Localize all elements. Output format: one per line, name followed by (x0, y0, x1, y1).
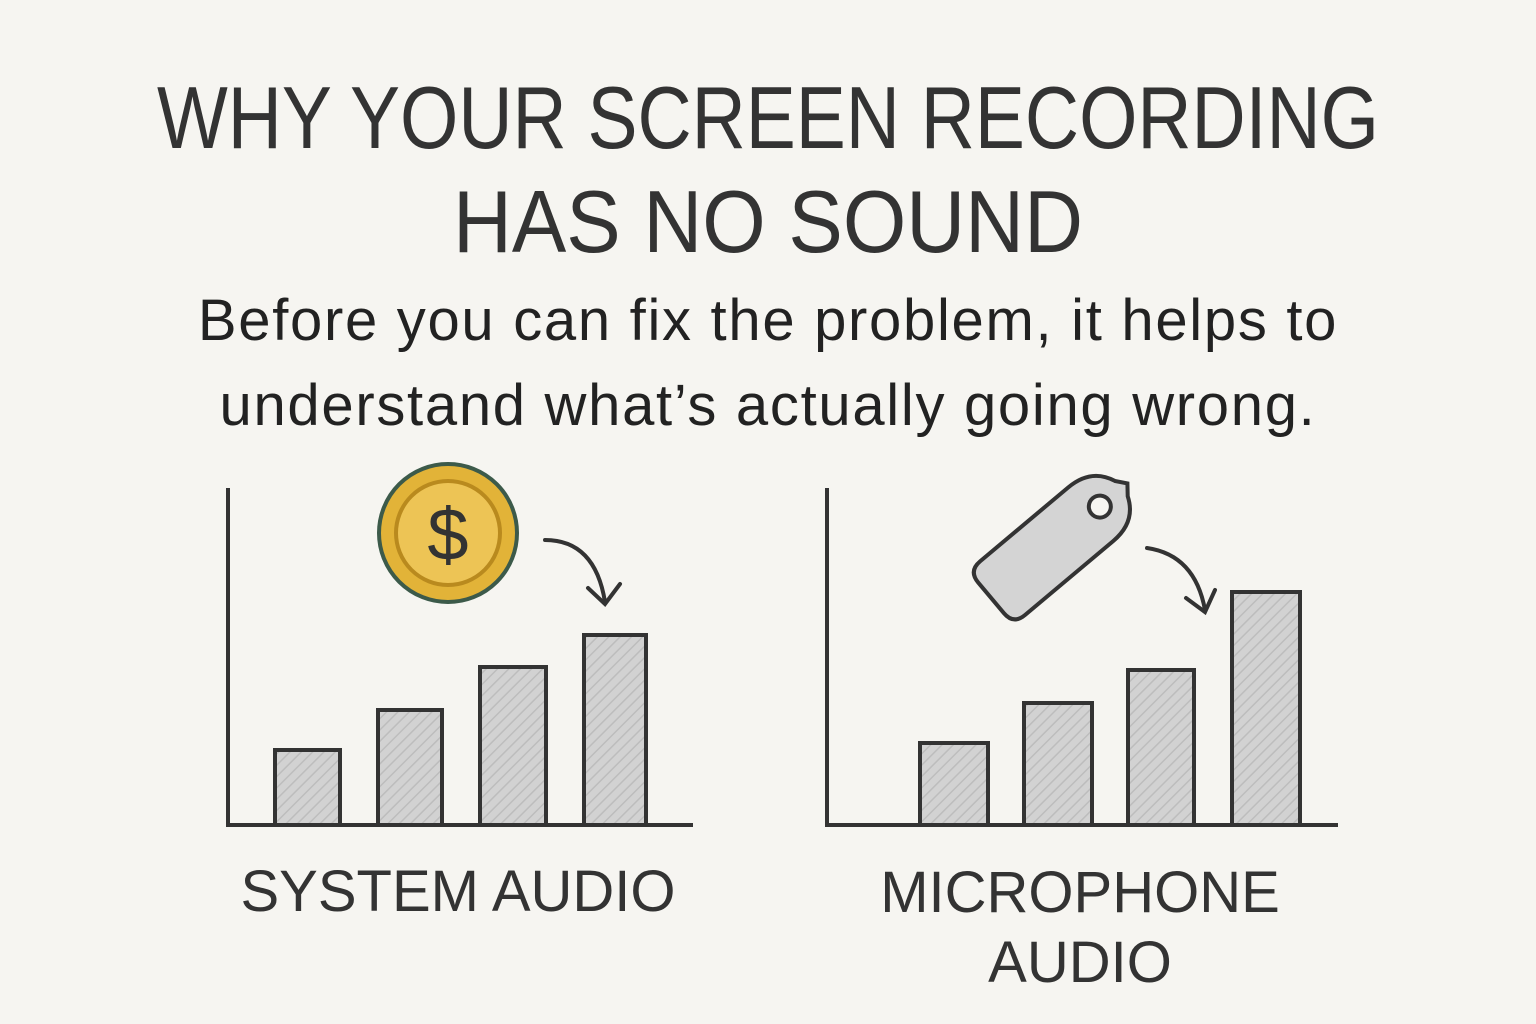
subtitle: Before you can fix the problem, it helps to (198, 288, 1338, 353)
icon: coin (379, 464, 517, 602)
label: microphone audio (880, 860, 1280, 995)
icon: coin: $ (427, 493, 469, 576)
arrow: coin to bar (545, 540, 620, 604)
label: microphone audio: MICROPHONE (880, 860, 1280, 925)
subtitle: understand what’s actually going wrong. (220, 373, 1316, 438)
arrow: tag to bar (1147, 548, 1215, 612)
chart: system audio (226, 488, 693, 825)
title: WHY YOUR SCREEN RECORDING (157, 68, 1379, 167)
title (157, 68, 1379, 271)
chart: microphone audio (825, 488, 1338, 825)
title: HAS NO SOUND (453, 172, 1083, 271)
label: system audio: SYSTEM AUDIO (240, 859, 676, 924)
subtitle (198, 288, 1338, 438)
icon: price tag (969, 457, 1150, 625)
label: microphone audio: AUDIO (988, 930, 1172, 995)
